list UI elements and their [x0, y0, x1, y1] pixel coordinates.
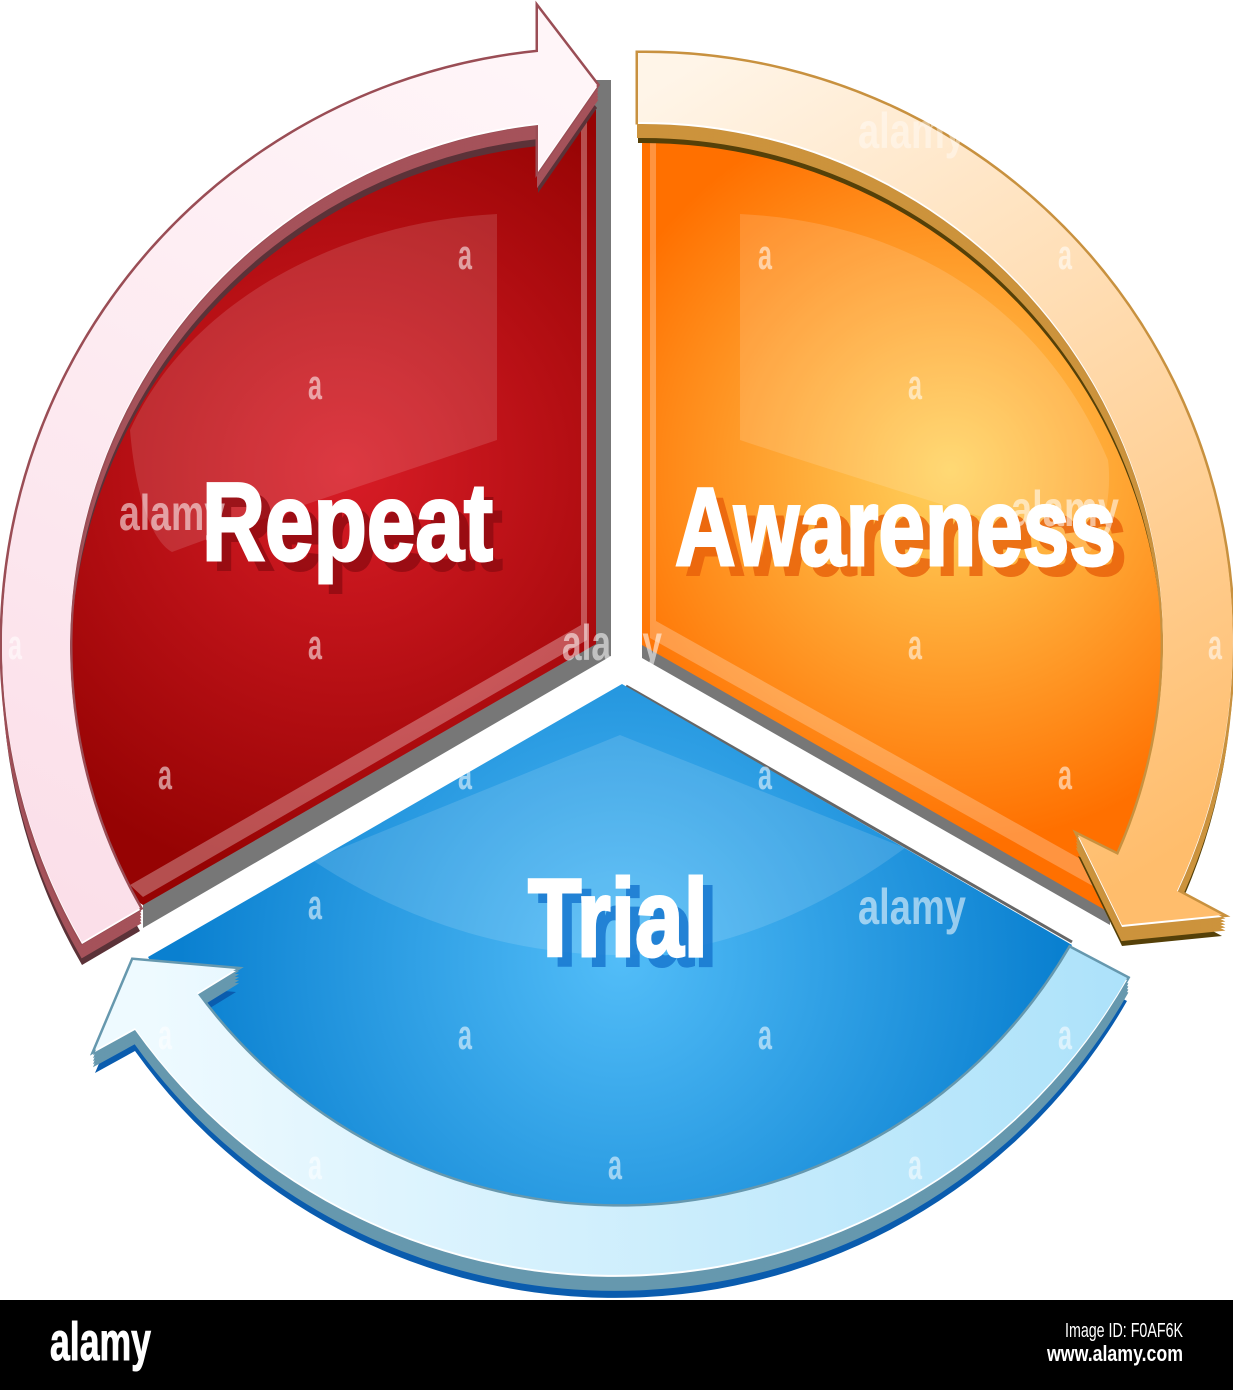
arrow: blue ribbon from Trial	[95, 948, 1127, 1298]
watermark: repeated stock marks	[8, 103, 1222, 1188]
watermark: repeated stock marks: a	[908, 361, 922, 408]
watermark: repeated stock marks: a	[1058, 231, 1072, 278]
arrow: orange ribbon from Awareness	[638, 53, 1233, 946]
heading: Repeat: Repeat	[212, 471, 503, 594]
footer logo: alamy	[50, 1312, 151, 1372]
watermark: repeated stock marks: a	[758, 751, 772, 798]
heading: Trial: Trial	[528, 857, 708, 980]
watermark: repeated stock marks: a	[758, 1011, 772, 1058]
watermark: repeated stock marks: a	[458, 1011, 472, 1058]
watermark: repeated stock marks: a	[1058, 1011, 1072, 1058]
watermark: repeated stock marks: a	[458, 751, 472, 798]
heading: Trial: Trial	[538, 867, 718, 990]
watermark: repeated stock marks: a	[8, 621, 22, 668]
panel: blue Trial sector	[148, 684, 1072, 1221]
watermark: repeated stock marks: a	[908, 621, 922, 668]
watermark: repeated stock marks: a	[458, 231, 472, 278]
arrow: red ribbon from Repeat	[2, 8, 597, 965]
watermark: repeated stock marks: a	[308, 1141, 322, 1188]
watermark: repeated stock marks: a	[158, 751, 172, 798]
watermark: repeated stock marks: a	[758, 231, 772, 278]
watermark: repeated stock marks: alamy	[858, 879, 966, 935]
panel: orange Awareness sector	[642, 115, 1175, 925]
watermark: repeated stock marks: alamy	[562, 615, 662, 671]
footer website: www.alamy.com	[1046, 1341, 1183, 1366]
watermark: repeated stock marks: a	[308, 881, 322, 928]
watermark: repeated stock marks: a	[1208, 621, 1222, 668]
watermark: repeated stock marks: a	[308, 361, 322, 408]
watermark: repeated stock marks: alamy	[858, 103, 966, 159]
watermark: repeated stock marks: a	[908, 1141, 922, 1188]
watermark: repeated stock marks: a	[308, 621, 322, 668]
watermark: repeated stock marks: a	[1058, 751, 1072, 798]
footer image id: Image ID: F0AF6K	[1065, 1320, 1183, 1342]
panel: red Repeat sector	[68, 80, 611, 928]
heading: Repeat: Repeat	[202, 461, 493, 584]
watermark: repeated stock marks: a	[608, 1141, 622, 1188]
watermark: repeated stock marks: a	[158, 1011, 172, 1058]
watermark: repeated stock marks: alamy	[1011, 481, 1119, 537]
footer bar	[0, 1300, 1233, 1390]
watermark: repeated stock marks: alamy	[119, 485, 225, 541]
